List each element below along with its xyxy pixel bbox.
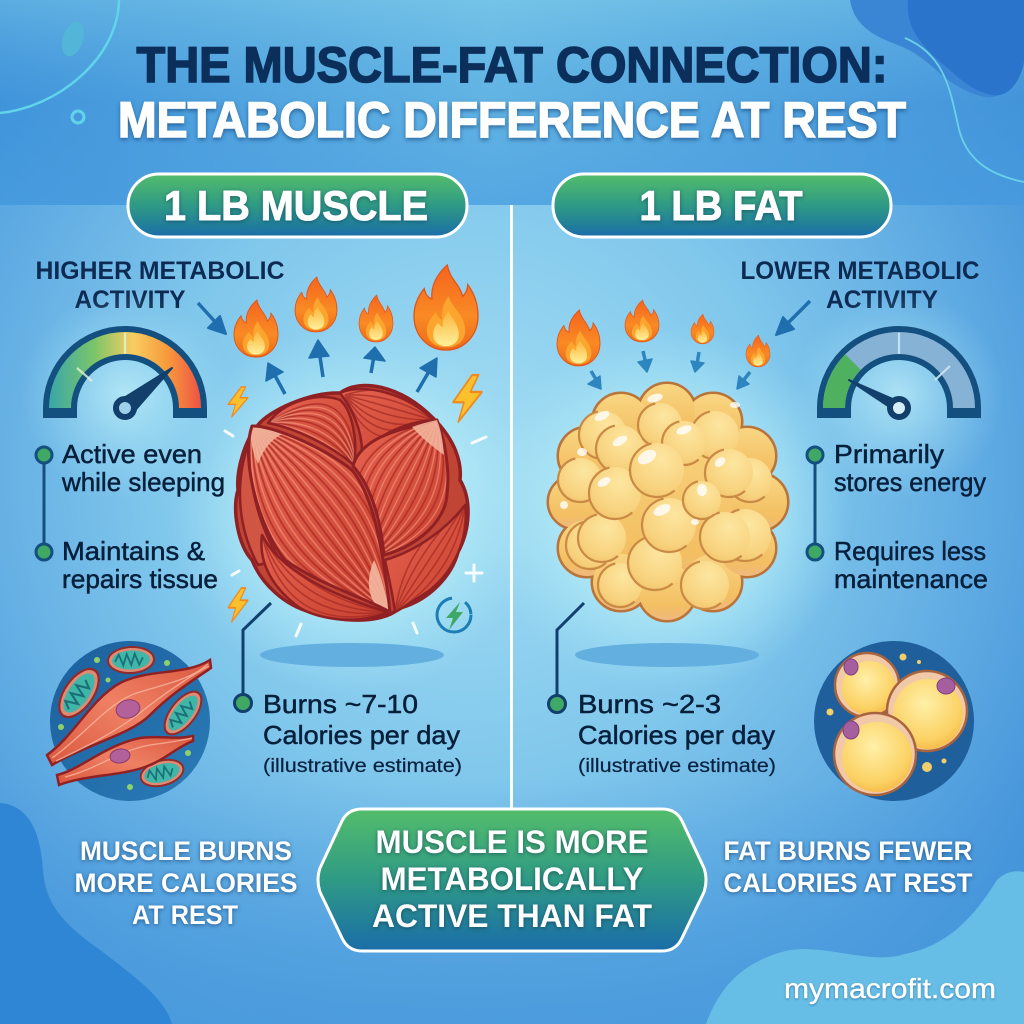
heading pill: 1 lb muscle: 1 LB MUSCLE [164,182,428,229]
heading pill: 1 lb fat [553,174,891,237]
caption: muscle burns more: AT REST [132,900,238,930]
title [118,37,906,148]
callout: muscle is more active: ACTIVE THAN FAT [372,898,652,934]
icon: muscle bundle [236,385,468,620]
arrow: label to flames [198,303,226,334]
bullets: muscle traits [36,439,225,594]
fat glow [482,325,852,695]
bullets: muscle traits: repairs tissue [62,564,218,594]
label: higher metabolic activity: HIGHER METABOLIC [36,257,284,285]
connector: muscle burn stat [234,603,271,712]
gauge: low metabolic activity [794,290,1004,500]
stat: fat calories: (illustrative estimate) [578,756,776,777]
bullets: fat traits: maintenance [834,564,988,594]
label: lower metabolic activity: ACTIVITY [826,286,938,314]
connector: fat burn stat [548,603,584,712]
muscle glow [167,325,537,695]
caption: muscle burns more: MORE CALORIES [74,868,298,898]
stat: fat calories: Calories per day [578,720,775,750]
arrows down to fat [588,351,750,389]
flames rising from muscle [234,265,478,357]
icon: lightning bolts [228,375,482,622]
shadow under fat [575,643,759,667]
caption: muscle burns more [74,836,298,930]
callout: muscle is more active: MUSCLE IS MORE [376,824,648,860]
sparkle ticks around muscle [225,431,486,636]
divider line [510,205,513,809]
website: mymacrofit.com [784,973,996,1004]
callout: muscle is more active [318,809,706,951]
title: THE MUSCLE-FAT CONNECTION: [136,37,888,93]
icon: energy badge [437,598,471,632]
label: lower metabolic activity [740,257,980,314]
bullets: fat traits: Requires less [834,536,986,566]
title: METABOLIC DIFFERENCE AT REST [118,92,906,148]
stat: muscle calories [263,689,462,777]
bullets: muscle traits: while sleeping [61,467,225,497]
bullets: fat traits [807,439,988,594]
icon: fat globule cluster [549,384,787,620]
stat: muscle calories: Burns ~7-10 [263,689,418,719]
bullets: muscle traits: Active even [62,439,202,469]
caption: fat burns fewer: CALORIES AT REST [724,868,973,898]
stat: muscle calories: (illustrative estimate) [263,756,462,777]
icon: muscle cell with mitochondria [47,641,211,801]
bullets: fat traits: stores energy [834,467,986,497]
stat: fat calories [578,689,776,777]
arrow: label to fat flames [776,301,810,335]
bullets: muscle traits: Maintains & [62,536,205,566]
caption: muscle burns more: MUSCLE BURNS [80,836,292,866]
callout: muscle is more active: METABOLICALLY [380,861,644,897]
caption: fat burns fewer [724,836,973,898]
bullets: fat traits: Primarily [834,439,944,469]
shadow under muscle [260,643,444,667]
gauge: high metabolic activity [20,290,230,500]
flames above fat [557,300,770,367]
caption: fat burns fewer: FAT BURNS FEWER [724,836,972,866]
heading pill: 1 lb muscle [128,174,467,237]
label: lower metabolic activity: LOWER METABOLIC [740,257,980,285]
stat: muscle calories: Calories per day [263,720,460,750]
heading pill: 1 lb fat: 1 LB FAT [640,182,803,229]
label: higher metabolic activity: ACTIVITY [74,286,186,314]
arrows up from muscle [266,340,437,394]
stat: fat calories: Burns ~2-3 [578,689,721,719]
icon: fat cells [814,641,974,801]
label: higher metabolic activity [36,257,284,314]
